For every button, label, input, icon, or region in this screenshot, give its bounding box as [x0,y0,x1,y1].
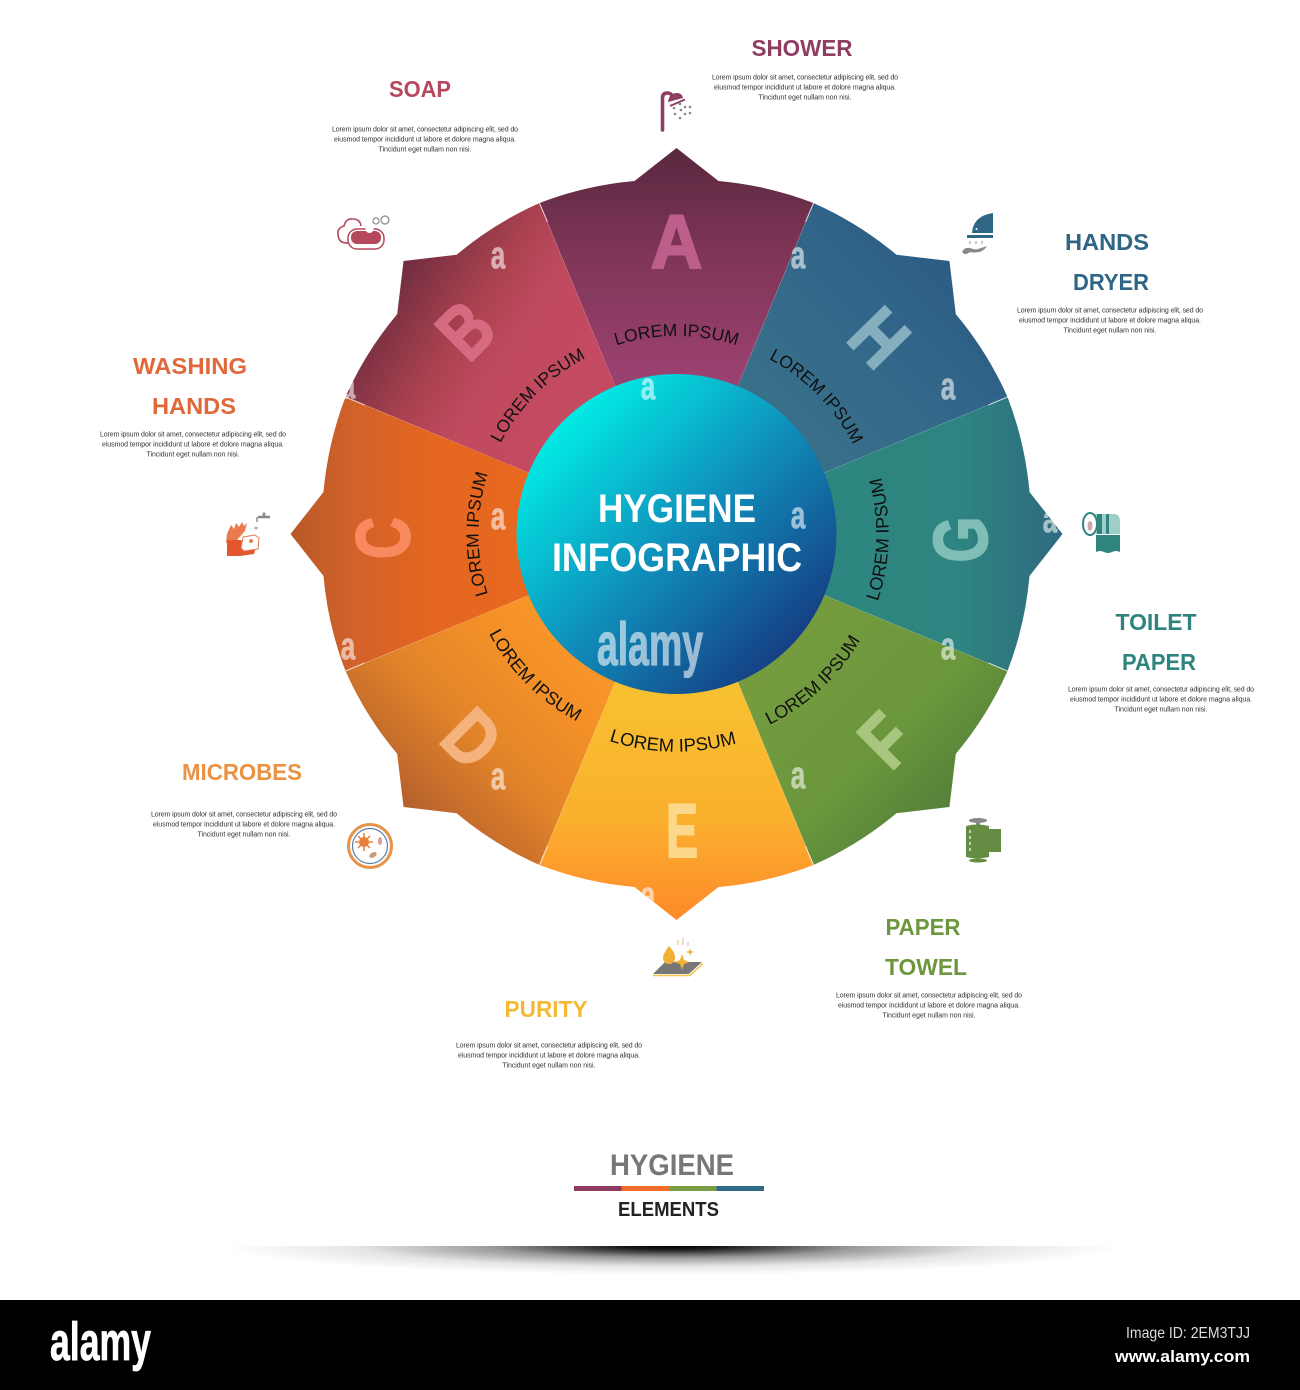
block: toilet paper: PAPER [1122,649,1196,675]
watermark [341,235,1058,917]
block: paper towel: Lorem ipsum dolor sit amet, consectetur adipiscing elit, sed do [836,992,1022,1000]
segment B [346,203,616,473]
block: shower [712,35,898,102]
block: purity [456,996,642,1070]
footer band: alamy [50,1312,151,1372]
icon: toilet paper [1083,513,1120,553]
block: hands dryer: Lorem ipsum dolor sit amet, consectetur adipiscing elit, sed do [1017,308,1203,314]
letter and label E: LOREM IPSUM [610,729,736,752]
footer heading: hygiene elements [574,1149,764,1221]
letter and label E: E [666,789,698,874]
watermark: a [1043,499,1058,541]
block: paper towel: TOWEL [885,954,967,980]
letter and label G [866,478,1004,600]
block: washing hands: Lorem ipsum dolor sit amet, consectetur adipiscing elit, sed do [100,432,286,438]
icon: purity [653,938,703,976]
segment H: H [832,292,925,384]
footer heading: hygiene elements: ELEMENTS [618,1199,719,1221]
block: purity: eiusmod tempor incididunt ut labore et dolore magna aliqua. [458,1052,640,1060]
segment C: LOREM IPSUM [466,472,488,596]
letter and label G: LOREM IPSUM [866,478,889,600]
block: paper towel [836,914,1022,1020]
block: paper towel: Tincidunt eget nullam non nisi. [882,1012,976,1020]
footer band [0,1300,1300,1390]
center title: INFOGRAPHIC [552,536,802,580]
letter and label D: LOREM IPSUM [490,628,582,721]
letter and label E [610,729,736,874]
block: soap [332,76,518,154]
block: toilet paper: Lorem ipsum dolor sit amet, consectetur adipiscing elit, sed do [1068,686,1254,694]
segment B: B [421,285,512,376]
letter and label F: LOREM IPSUM [765,634,860,724]
watermark: a [641,366,656,408]
segment A: LOREM IPSUM [614,324,739,345]
watermark: a [491,235,506,277]
block: hands dryer: DRYER [1073,269,1149,295]
segment D [307,437,773,904]
footer heading: hygiene elements: HYGIENE [610,1149,734,1182]
center title [552,487,802,580]
icon: shower [662,93,691,130]
block: toilet paper [1068,609,1254,714]
block: purity: PURITY [504,996,588,1022]
block: hands dryer [1017,229,1203,334]
watermark: a [341,626,356,668]
segment B: LOREM IPSUM [490,348,584,442]
block: microbes: Tincidunt eget nullam non nisi. [198,832,291,838]
watermark: a [791,495,806,537]
block: washing hands: WASHING [133,353,247,379]
block: toilet paper: Tincidunt eget nullam non nisi. [1114,706,1208,714]
watermark: a [941,626,956,668]
block: hands dryer: Tincidunt eget nullam non nisi. [1064,328,1157,334]
block: soap: Lorem ipsum dolor sit amet, consectetur adipiscing elit, sed do [332,126,518,134]
letter and label D [425,628,582,785]
segment C [290,397,529,671]
block: paper towel: PAPER [886,914,961,940]
block: hands dryer: HANDS [1065,229,1149,255]
letter and label F [765,634,930,784]
segment A [540,148,814,386]
watermark: a [491,496,506,538]
block: microbes: MICROBES [182,759,302,785]
segment H: LOREM IPSUM [770,348,864,444]
icon: soap [338,216,389,249]
watermark: a [641,875,656,917]
segment G [676,397,1062,671]
block: washing hands: Tincidunt eget nullam non nisi. [146,452,240,458]
letter and label D: D [425,693,518,785]
watermark: a [491,756,506,798]
icon: washing hands [226,512,270,556]
segment E [540,534,814,920]
segment A: A [650,200,702,285]
block: shower: SHOWER [752,35,853,61]
block: hands dryer: eiusmod tempor incididunt ut labore et dolore magna aliqua. [1019,318,1201,324]
block: shower: Tincidunt eget nullam non nisi. [758,94,852,102]
block: microbes: eiusmod tempor incididunt ut labore et dolore magna aliqua. [153,822,335,828]
block: washing hands [100,353,286,458]
footer band: Image ID: 2EM3TJJ [1126,1325,1250,1342]
icon: microbes [348,824,392,868]
footer band: www.alamy.com [1114,1347,1250,1366]
center title: HYGIENE [598,487,756,531]
block: toilet paper: TOILET [1116,609,1196,635]
block: shower: Lorem ipsum dolor sit amet, consectetur adipiscing elit, sed do [712,74,898,82]
watermark: alamy [597,611,703,678]
block: paper towel: eiusmod tempor incididunt ut labore et dolore magna aliqua. [838,1002,1020,1010]
block: shower: eiusmod tempor incididunt ut labore et dolore magna aliqua. [714,84,896,92]
wheel diagram [290,148,1062,920]
block: soap: Tincidunt eget nullam non nisi. [378,146,472,154]
letter and label G: G [919,516,1004,562]
watermark: a [791,235,806,277]
segment H [738,203,1008,473]
segment C: C [342,517,426,559]
block: washing hands: eiusmod tempor incididunt ut labore et dolore magna aliqua. [102,442,284,448]
block: microbes [151,759,337,838]
block: purity: Tincidunt eget nullam non nisi. [502,1062,596,1070]
block: microbes: Lorem ipsum dolor sit amet, consectetur adipiscing elit, sed do [151,812,337,818]
watermark: a [341,365,356,407]
icon: hands dryer [962,213,993,254]
block: washing hands: HANDS [152,393,236,419]
ground shadow [210,1246,1120,1276]
watermark: a [941,366,956,408]
watermark: a [791,755,806,797]
block: soap: eiusmod tempor incididunt ut labore et dolore magna aliqua. [334,136,516,144]
letter and label F: F [843,697,930,784]
block: soap: SOAP [389,76,451,102]
icon: paper towel [966,818,1001,862]
block: toilet paper: eiusmod tempor incididunt ut labore et dolore magna aliqua. [1070,696,1252,704]
block: purity: Lorem ipsum dolor sit amet, consectetur adipiscing elit, sed do [456,1042,642,1050]
center circle [516,374,836,694]
segment F [580,437,1046,904]
